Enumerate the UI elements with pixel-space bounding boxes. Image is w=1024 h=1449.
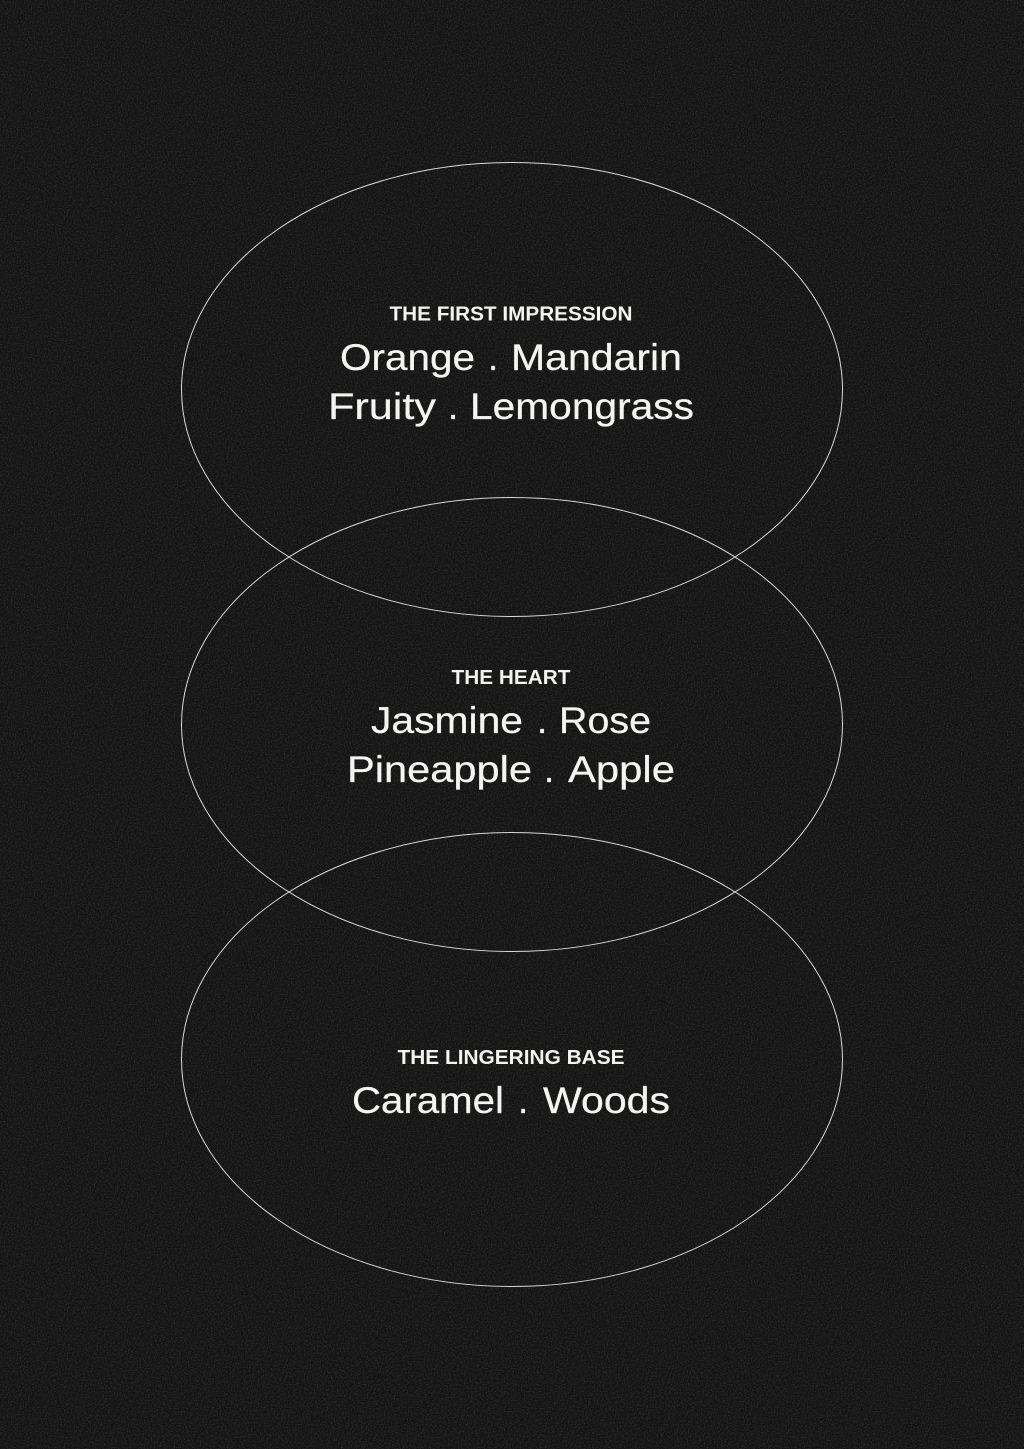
heading: the first impression: THE FIRST IMPRESSION (390, 304, 632, 326)
notes: first impression: Mandarin (511, 337, 682, 378)
notes: lingering base: Caramel (352, 1080, 504, 1121)
notes: the heart: Jasmine (371, 700, 523, 741)
heading: the heart: THE HEART (452, 667, 570, 689)
notes: the heart: Apple (568, 749, 675, 790)
heading: the lingering base: THE LINGERING BASE (398, 1047, 624, 1069)
notes: lingering base: . (518, 1080, 528, 1121)
notes: lingering base (352, 1080, 670, 1121)
notes: the heart (347, 700, 675, 790)
notes: the heart: . (544, 749, 554, 790)
notes: the heart: . (537, 700, 547, 741)
notes: lingering base: Woods (543, 1080, 670, 1121)
notes: first impression (328, 337, 694, 427)
ellipse: lingering base (182, 832, 842, 1286)
ellipse: the heart (182, 498, 842, 952)
notes: the heart: Rose (559, 700, 651, 741)
ellipse: first impression (182, 162, 842, 616)
notes: first impression: Fruity (328, 386, 437, 427)
notes: first impression: . (488, 337, 498, 378)
notes: first impression: . (448, 386, 458, 427)
notes: the heart: Pineapple (347, 749, 532, 790)
notes: first impression: Lemongrass (470, 386, 694, 427)
notes: first impression: Orange (340, 337, 475, 378)
